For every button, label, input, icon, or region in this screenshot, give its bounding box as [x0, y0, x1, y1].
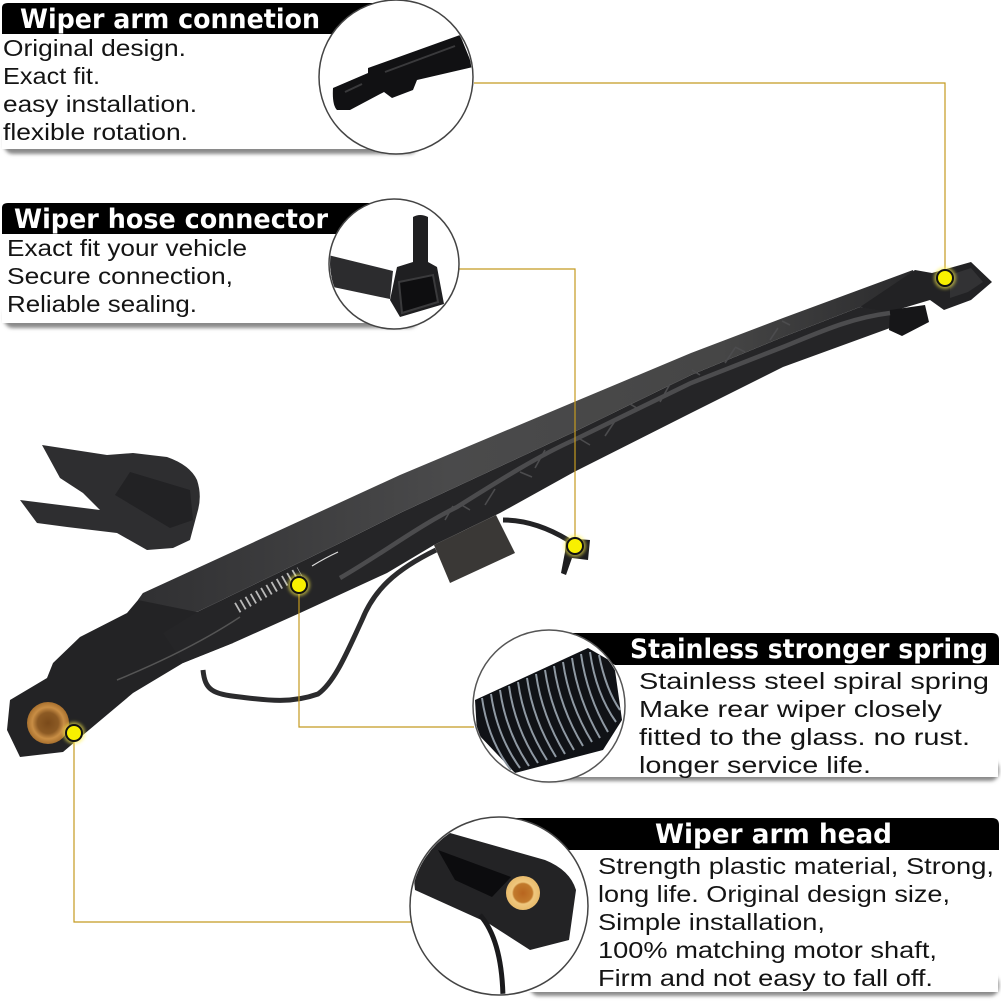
panel: wiper hose connector: Secure connection,: [7, 263, 233, 289]
panel: wiper arm head: Strength plastic material, Strong,: [598, 853, 994, 879]
panel: stainless stronger spring: Stainless steel spiral spring: [639, 668, 989, 694]
panel: wiper arm head: 100% matching motor shaft,: [598, 937, 937, 963]
panel: wiper arm head: long life. Original design size,: [598, 881, 950, 907]
panel: wiper arm head: [410, 817, 999, 998]
panel: stainless stronger spring: Make rear wiper closely: [639, 696, 943, 722]
icon: hose connector circle: [328, 199, 459, 329]
marker dots: [63, 267, 956, 744]
icon: arm connection circle: [319, 0, 473, 154]
panel: stainless stronger spring: fitted to the glass. no rust.: [639, 724, 970, 750]
panel: wiper arm connection: Wiper arm connetion: [20, 4, 320, 35]
panel: wiper arm head: Firm and not easy to fall off.: [598, 965, 933, 991]
panel: wiper hose connector: Exact fit your vehicle: [7, 235, 247, 261]
wiper arm illustration: [7, 262, 992, 757]
panel: wiper arm connection: flexible rotation.: [3, 119, 188, 145]
panel: wiper arm head: Simple installation,: [598, 909, 825, 935]
panel: wiper arm connection: easy installation.: [3, 91, 197, 117]
panel: stainless stronger spring: [473, 630, 999, 782]
icon: arm head circle: [410, 817, 588, 998]
icon: spring circle: [473, 630, 625, 782]
connector leader lines: [74, 83, 945, 922]
panel: wiper arm connection: Original design.: [3, 35, 186, 61]
wiper arm cap: [20, 445, 200, 550]
panel: wiper hose connector: Wiper hose connector: [14, 204, 329, 235]
panel: wiper arm head: Wiper arm head: [655, 819, 892, 850]
panel: wiper arm connection: Exact fit.: [3, 63, 100, 89]
panel: wiper arm connection: [2, 0, 473, 154]
panel: stainless stronger spring: longer service life.: [639, 752, 871, 778]
panel: wiper hose connector: [2, 199, 459, 329]
panel: wiper hose connector: Reliable sealing.: [7, 291, 197, 317]
